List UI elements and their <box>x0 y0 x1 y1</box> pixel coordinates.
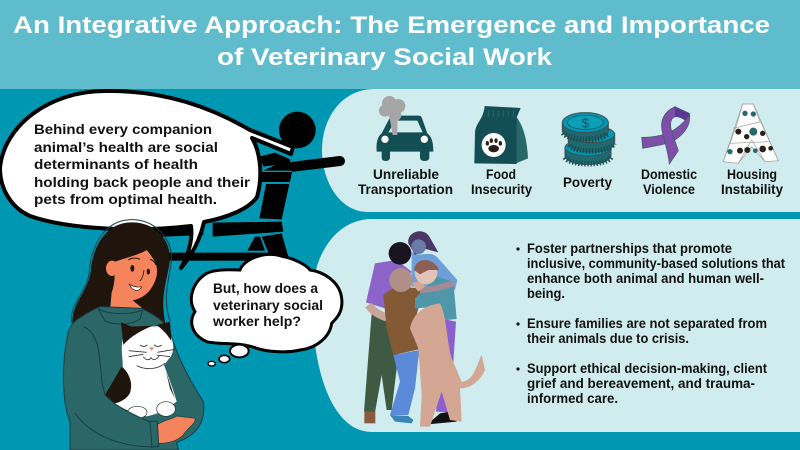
thought bubble <box>191 255 342 366</box>
label: Housing Instability: Housing <box>727 167 777 182</box>
label: Poverty: Poverty <box>563 175 612 190</box>
icon: stack of coins <box>562 113 615 164</box>
bullet: partnerships: enhance both animal and human well- <box>527 270 764 286</box>
black stick figure behind the speech bubble <box>147 112 340 261</box>
icon: pet food bag <box>474 106 528 164</box>
speech bubble: holding back people and their <box>34 174 251 190</box>
bullet: partnerships: being. <box>527 285 565 301</box>
speech bubble: Behind every companion <box>34 121 212 137</box>
label: Housing Instability: Instability <box>721 182 783 197</box>
header band with title: of Veterinary Social Work <box>217 44 553 71</box>
icon: house of cards <box>723 104 778 163</box>
thought bubble: But, how does a <box>213 280 318 296</box>
bullet: families <box>516 315 767 346</box>
bullet: families: Ensure families are not separated from <box>527 315 767 331</box>
speech bubble: pets from optimal health. <box>34 191 217 207</box>
label: Food Insecurity: Insecurity <box>471 182 532 197</box>
panel: how social workers help background <box>312 219 800 432</box>
speech bubble: determinants of health <box>34 156 198 172</box>
label: Food Insecurity: Food <box>486 167 516 182</box>
label: Food Insecurity <box>471 167 532 197</box>
family hugging with dog illustration <box>364 231 485 427</box>
bullet: ethics and care <box>516 360 767 406</box>
bullet: families: their animals due to crisis. <box>527 330 689 346</box>
speech bubble: animal’s health are social <box>34 139 218 155</box>
label: Domestic Violence <box>641 167 697 197</box>
label: Unreliable Transportation <box>358 167 453 197</box>
bullet: ethics and care: Support ethical decision-making, client <box>527 360 767 376</box>
woman holding a cat <box>63 220 204 450</box>
header band with title: An Integrative Approach: The Emergence and Importance <box>13 12 770 39</box>
bullet: partnerships: Foster partnerships that promote <box>527 240 732 256</box>
speech bubble <box>0 91 293 268</box>
thought bubble: worker help? <box>212 313 301 329</box>
bullet: partnerships <box>516 240 785 301</box>
header band with title <box>0 0 800 89</box>
icon: stack of coins: $ <box>582 116 590 131</box>
thought bubble: veterinary social <box>213 297 323 313</box>
bullet list <box>516 240 785 406</box>
bullet: ethics and care: grief and bereavement, and trauma- <box>527 375 755 391</box>
panel: social determinants background <box>322 89 800 212</box>
label: Housing Instability <box>721 167 783 197</box>
label: Domestic Violence: Violence <box>643 182 695 197</box>
label: Unreliable Transportation: Transportation <box>358 182 453 197</box>
label: Unreliable Transportation: Unreliable <box>373 167 439 182</box>
icon: purple awareness ribbon <box>642 107 690 164</box>
icon: car with smoke <box>377 96 433 161</box>
label: Domestic Violence: Domestic <box>641 167 697 182</box>
bullet: ethics and care: informed care. <box>527 390 618 406</box>
